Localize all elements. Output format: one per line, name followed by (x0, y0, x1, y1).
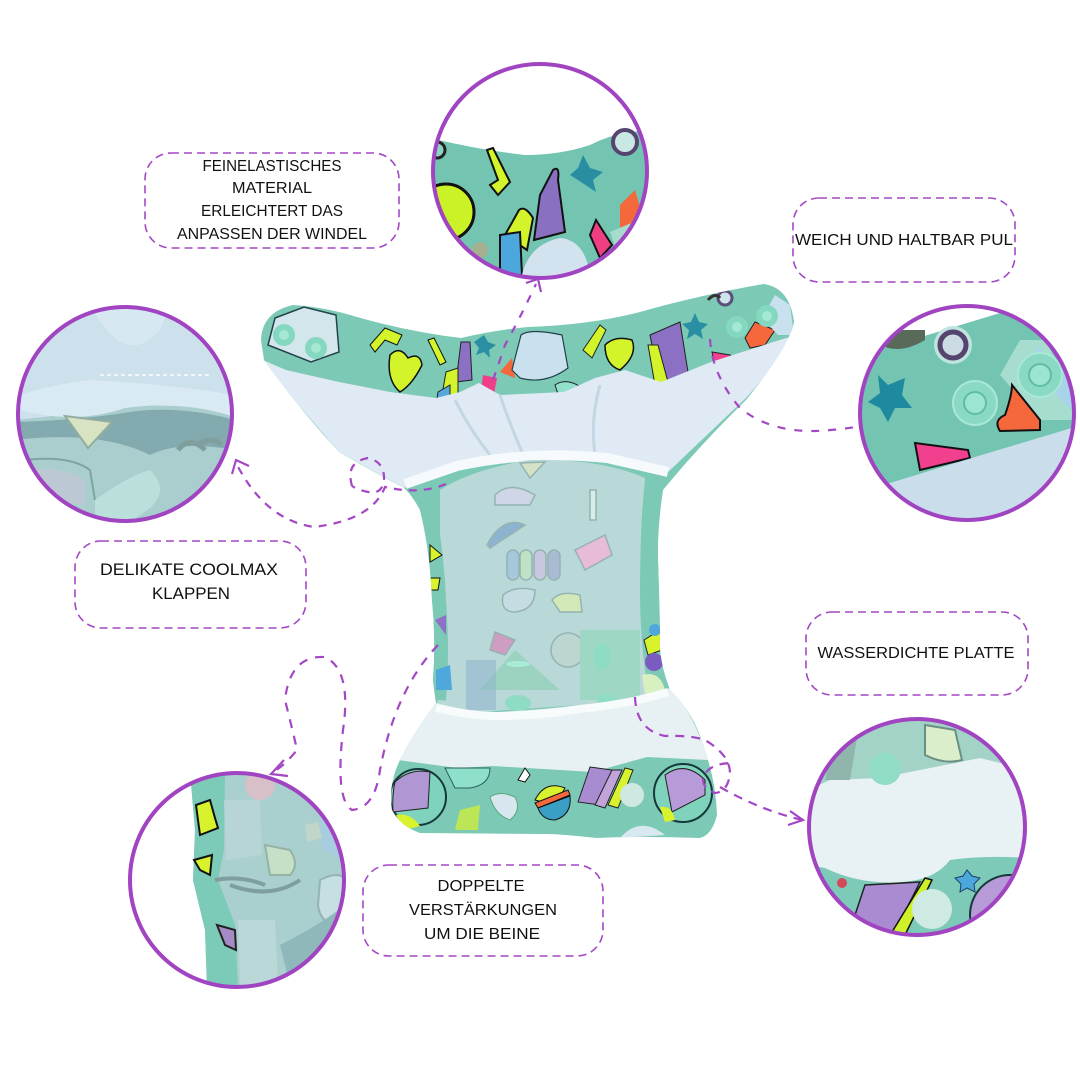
bottom print: sticks (578, 767, 644, 808)
print: heart (389, 351, 422, 392)
print: orange (500, 358, 515, 378)
print: center bottle (512, 332, 568, 380)
callout: Doppelte Verstaerkungen: DOPPELTE (438, 878, 524, 895)
white inner panel (258, 335, 800, 488)
callout: Feinelastisches Material (145, 153, 399, 248)
callout: Feinelastisches Material: MATERIAL (232, 180, 312, 197)
detail circle: snaps PUL (860, 305, 1075, 525)
callout: Doppelte Verstaerkungen: UM DIE BEINE (424, 926, 540, 943)
snaps (273, 305, 778, 359)
callout: Feinelastisches Material: ANPASSEN DER WINDEL (177, 226, 367, 243)
print: right sticks (650, 322, 688, 385)
left wing white blob (268, 307, 339, 362)
callout: Weich und haltbar PUL: WEICH UND HALTBAR PUL (795, 232, 1013, 249)
leg accents left (430, 545, 452, 690)
arrow: to top circle (493, 279, 541, 380)
print: right wing (711, 351, 731, 361)
callout: Doppelte Verstaerkungen (363, 865, 603, 956)
callout: Weich und haltbar PUL (793, 198, 1015, 282)
detail circle: waterproof panel (807, 717, 1027, 937)
detail circle: leg reinforcement (130, 770, 345, 988)
detail circle: elastic material (418, 60, 650, 285)
arrow: to left circle (232, 458, 446, 527)
print: lime apple (605, 338, 634, 370)
callout: Wasserdichte Platte: WASSERDICHTE PLATTE (818, 645, 1014, 662)
detail circle: coolmax flaps (15, 305, 235, 525)
white panel folds (455, 385, 600, 455)
callout: Wasserdichte Platte (806, 612, 1028, 695)
waist elastic (405, 455, 668, 484)
callout: Feinelastisches Material: ERLEICHTERT DAS (201, 203, 343, 220)
bottom white band (398, 688, 708, 772)
arrow: to right circle (710, 339, 871, 431)
satin snaps (505, 644, 617, 711)
callout: Doppelte Verstaerkungen: VERSTÄRKUNGEN (409, 901, 557, 919)
bottom print: right ball (654, 764, 712, 822)
callout: Delikate Coolmax Klappen (75, 541, 306, 628)
print: rings (718, 291, 732, 305)
bottom print: left ball (390, 769, 446, 830)
bottom print: white corner (620, 826, 665, 838)
right leg elastic (649, 490, 660, 690)
left leg elastic (426, 500, 440, 700)
bottom print: stars and cloud (455, 768, 530, 830)
arrow: to bottom right circle (635, 697, 803, 825)
print: star and pink (474, 335, 496, 358)
diaper illustration (250, 280, 810, 850)
callout: Delikate Coolmax Klappen: KLAPPEN (152, 584, 230, 603)
leg accents right (642, 624, 665, 695)
callout: Delikate Coolmax Klappen: DELIKATE COOLMAX (100, 560, 278, 579)
arrow: to bottom left circle (271, 645, 438, 810)
callout: Feinelastisches Material: FEINELASTISCHES (202, 158, 342, 175)
satin pocket (436, 460, 650, 715)
bottom print: rocket (535, 786, 570, 820)
print: popsicles (456, 342, 472, 382)
print: lettering (370, 328, 402, 352)
bottom print: teal blob (445, 768, 490, 788)
